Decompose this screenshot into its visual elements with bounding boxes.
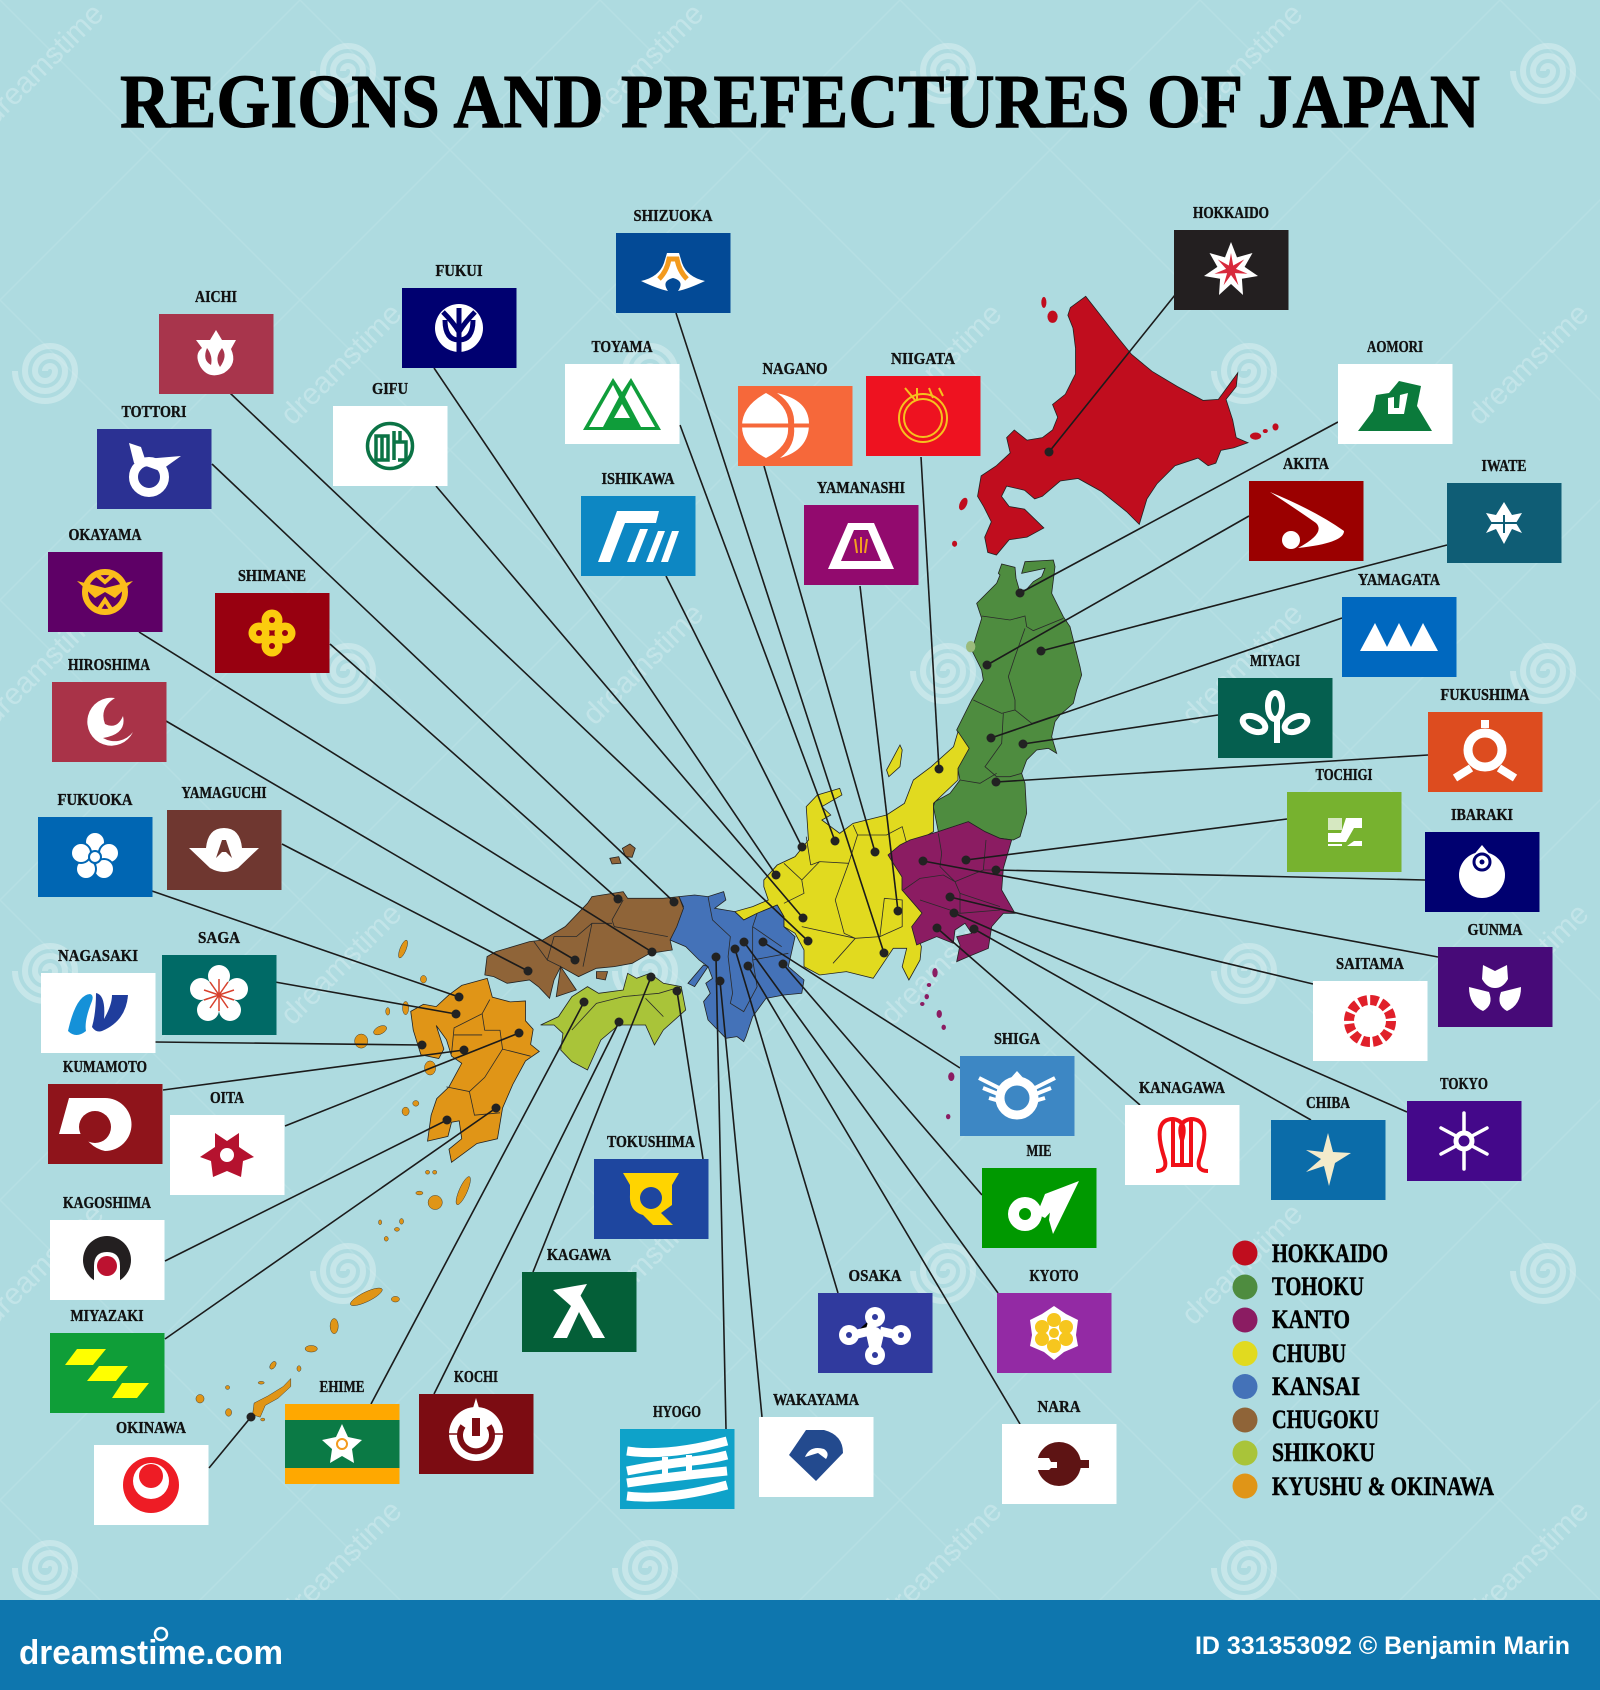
- flag: Ishikawa: [581, 469, 696, 576]
- flag: Toyama: [565, 337, 680, 444]
- watermark text: dreamstime: [1175, 0, 1309, 131]
- leader: Chiba: [970, 924, 1311, 1120]
- flag: Gunma: GUNMA: [1468, 920, 1523, 939]
- flag: Nagasaki: [41, 946, 156, 1053]
- flag: Aomori: [1338, 337, 1452, 444]
- flag: Tottori: TOTTORI: [122, 402, 187, 421]
- flag: Aomori: AOMORI: [1367, 337, 1423, 356]
- leader: Yamanashi: [860, 586, 902, 916]
- flag: Kumamoto: KUMAMOTO: [63, 1057, 147, 1076]
- flag: Tokushima: TOKUSHIMA: [607, 1132, 696, 1151]
- flag: Kyoto: KYOTO: [1030, 1266, 1078, 1285]
- leader: Shiga: [758, 938, 960, 1068]
- leader: Yamaguchi: [282, 844, 532, 976]
- leader lines and location dots: [139, 295, 1447, 1468]
- watermark text: dreamstime: [274, 1494, 408, 1628]
- leader: Shizuoka: [676, 313, 888, 958]
- footer bar: [0, 1600, 1600, 1690]
- leader: Nara: [744, 962, 1020, 1424]
- leader: Hokkaido: [1044, 295, 1175, 456]
- region: Kyushu and Okinawa: [196, 939, 539, 1421]
- flag: Saitama: SAITAMA: [1336, 954, 1405, 973]
- watermark text: dreamstime: [1461, 1494, 1595, 1628]
- region: Hokkaido: [952, 296, 1279, 555]
- leader: Shimane: [330, 644, 622, 904]
- flag: Kanagawa: [1125, 1078, 1240, 1185]
- leader: Hyogo: [712, 952, 726, 1429]
- flag: Miyagi: MIYAGI: [1250, 651, 1300, 670]
- legend: Hokkaido: [1232, 1239, 1388, 1268]
- leader: Kochi: [434, 1018, 624, 1394]
- watermark text: dreamstime: [874, 297, 1008, 431]
- flag: Shimane: [215, 566, 330, 673]
- flag: Ehime: EHIME: [320, 1377, 364, 1396]
- legend: Tohoku: [1232, 1272, 1364, 1301]
- leader: Fukui: [434, 368, 780, 880]
- legend: Kanto: [1232, 1305, 1350, 1334]
- flag: Tochigi: [1287, 765, 1402, 872]
- leader: Iwate: [1036, 545, 1447, 656]
- flag: Kyoto: [997, 1266, 1112, 1373]
- leader: Okinawa: [209, 1412, 256, 1468]
- leader: Miyagi: [1018, 715, 1218, 748]
- flag: Miyagi: [1218, 651, 1332, 758]
- flag: Shizuoka: SHIZUOKA: [634, 206, 713, 225]
- flag: Nagano: [738, 359, 852, 466]
- flag: Miyazaki: MIYAZAKI: [70, 1306, 144, 1325]
- flag: Fukui: [402, 261, 516, 368]
- leader: Yamagata: [986, 618, 1342, 742]
- leader: Gifu: [436, 486, 808, 922]
- leader: Tokyo: [950, 908, 1407, 1112]
- leader: Kumamoto: [163, 1046, 468, 1090]
- watermark text: dreamstime: [874, 897, 1008, 1031]
- legend: Chubu: [1232, 1339, 1346, 1368]
- leader: Mie: [778, 960, 982, 1195]
- flag: Okayama: [48, 525, 162, 632]
- flag: Nagasaki: NAGASAKI: [58, 946, 138, 965]
- flag: Fukuoka: [38, 790, 152, 897]
- flag: Niigata: NIIGATA: [891, 349, 956, 368]
- title: REGIONS AND PREFECTURES OF JAPAN: [120, 60, 1480, 144]
- flag: Saga: SAGA: [198, 928, 241, 947]
- leader: Nagasaki: [155, 1040, 426, 1050]
- flag: Okinawa: OKINAWA: [116, 1418, 187, 1437]
- leader: Wakayama: [716, 976, 762, 1417]
- flag: Toyama: TOYAMA: [592, 337, 653, 356]
- legend: Hokkaido: HOKKAIDO: [1272, 1239, 1388, 1268]
- watermark text: dreamstime: [274, 897, 408, 1031]
- flag: Wakayama: [759, 1390, 874, 1497]
- flag: Kagawa: KAGAWA: [547, 1245, 612, 1264]
- flag: Kanagawa: KANAGAWA: [1139, 1078, 1226, 1097]
- leader: Kagoshima: [165, 1116, 452, 1261]
- flag: Ibaraki: IBARAKI: [1451, 805, 1513, 824]
- region: Kanto: [888, 822, 1015, 977]
- flag: Yamanashi: YAMANASHI: [817, 478, 905, 497]
- flag: Kochi: KOCHI: [454, 1367, 498, 1386]
- watermark text: dreamstime: [874, 1494, 1008, 1628]
- flag: Mie: [982, 1141, 1096, 1248]
- flag: Yamagata: [1342, 570, 1456, 677]
- flag: Aichi: [159, 287, 274, 394]
- flag: Akita: AKITA: [1283, 454, 1330, 473]
- flag: Ibaraki: [1425, 805, 1540, 912]
- flag: Niigata: [866, 349, 980, 456]
- leader: Akita: [982, 516, 1249, 670]
- flag: Miyazaki: [50, 1306, 164, 1413]
- region: Shikoku: [541, 973, 686, 1070]
- flag: Hyogo: HYOGO: [653, 1402, 701, 1421]
- legend: Kansai: KANSAI: [1272, 1372, 1360, 1401]
- flag: Ehime: [285, 1377, 400, 1484]
- leader: Tokushima: [672, 986, 703, 1159]
- leader: Saitama: [946, 892, 1313, 984]
- flag: Gifu: [333, 379, 448, 486]
- flag: Gifu: GIFU: [372, 379, 408, 398]
- flag: Wakayama: WAKAYAMA: [773, 1390, 860, 1409]
- flag: Tottori: [97, 402, 212, 509]
- islands: Izu: [920, 983, 954, 1119]
- flag: Oita: OITA: [210, 1088, 245, 1107]
- region: Chubu: [735, 732, 969, 980]
- leader: Miyazaki: [165, 1104, 500, 1339]
- flag: Kumamoto: [48, 1057, 162, 1164]
- leader: Niigata: [921, 457, 944, 774]
- legend: Kyushu and Okinawa: KYUSHU & OKINAWA: [1272, 1472, 1494, 1501]
- leader: Oita: [285, 1028, 524, 1126]
- flag: Osaka: OSAKA: [848, 1266, 902, 1285]
- watermark text: dreamstime: [1461, 897, 1595, 1031]
- leader: Fukushima: [992, 755, 1428, 786]
- flag: Saitama: [1313, 954, 1428, 1061]
- legend: Kansai: [1232, 1372, 1360, 1401]
- leader: Ishikawa: [666, 576, 806, 852]
- flag: Gunma: [1438, 920, 1552, 1027]
- flag: Okinawa: [94, 1418, 208, 1525]
- flag: Fukuoka: FUKUOKA: [58, 790, 133, 809]
- leader: Ibaraki: [992, 866, 1425, 880]
- flag: Fukushima: [1428, 685, 1542, 792]
- leader: Aomori: [1016, 422, 1338, 598]
- leader: Osaka: [730, 944, 838, 1293]
- watermark text: dreamstime: [576, 0, 710, 131]
- flag: Kagawa: [522, 1245, 636, 1352]
- leader: Kyoto: [740, 938, 998, 1293]
- watermark text: dreamstime: [576, 597, 710, 731]
- watermark text: dreamstime: [1175, 597, 1309, 731]
- flag: Tochigi: TOCHIGI: [1316, 765, 1373, 784]
- flag: Tokyo: TOKYO: [1440, 1074, 1488, 1093]
- watermark text: dreamstime: [576, 1197, 710, 1331]
- region: Kansai: [670, 892, 804, 1042]
- flag: Hokkaido: HOKKAIDO: [1193, 203, 1269, 222]
- legend: [1232, 1239, 1494, 1501]
- flag: Chiba: [1271, 1093, 1386, 1200]
- footer logo text: dreamstime.com: [19, 1634, 283, 1672]
- watermark text: dreamstime: [274, 297, 408, 431]
- flag: Kochi: [419, 1367, 534, 1474]
- footer logo icon: [155, 1628, 167, 1640]
- leader: Kagawa: [533, 972, 656, 1272]
- flag: Nara: [1002, 1397, 1116, 1504]
- flag: Tokushima: [594, 1132, 708, 1239]
- leader: Nagano: [764, 466, 880, 856]
- flag: Nagano: NAGANO: [762, 359, 828, 378]
- map of Japan: [196, 296, 1279, 1421]
- watermark text: dreamstime: [1461, 297, 1595, 431]
- flag: Yamaguchi: [167, 783, 282, 890]
- flag: Fukui: FUKUI: [436, 261, 483, 280]
- flag: Nara: NARA: [1038, 1397, 1081, 1416]
- flag: Ishikawa: ISHIKAWA: [602, 469, 675, 488]
- legend: Chugoku: CHUGOKU: [1272, 1405, 1379, 1434]
- flag: Saga: [162, 928, 276, 1035]
- footer image credit: ID 331353092 © Benjamin Marin: [1195, 1632, 1570, 1660]
- flag: Shizuoka: [616, 206, 730, 313]
- leader: Toyama: [680, 425, 840, 846]
- flag: Shiga: [960, 1029, 1074, 1136]
- legend: Shikoku: [1232, 1438, 1375, 1467]
- leader: Gunma: [918, 856, 1438, 957]
- flag: Iwate: IWATE: [1482, 456, 1526, 475]
- flag: Aichi: AICHI: [195, 287, 237, 306]
- flag: Kagoshima: KAGOSHIMA: [63, 1193, 152, 1212]
- leader: Saga: [275, 982, 460, 1018]
- leader: Tottori: [212, 464, 678, 906]
- flag: Hiroshima: HIROSHIMA: [68, 655, 151, 674]
- watermark text: dreamstime: [1175, 1197, 1309, 1331]
- flag: Iwate: [1447, 456, 1562, 563]
- leader: Fukuoka: [152, 891, 464, 1002]
- legend: Chubu: CHUBU: [1272, 1339, 1346, 1368]
- legend: Kanto: KANTO: [1272, 1305, 1350, 1334]
- flag: Osaka: [818, 1266, 932, 1373]
- flag: Mie: MIE: [1026, 1141, 1052, 1160]
- leader: Aichi: [230, 393, 812, 946]
- flag: Oita: [170, 1088, 284, 1195]
- flag: Shimane: SHIMANE: [238, 566, 306, 585]
- flag: Kagoshima: [50, 1193, 164, 1300]
- legend: Tohoku: TOHOKU: [1272, 1272, 1364, 1301]
- flag: Yamagata: YAMAGATA: [1358, 570, 1441, 589]
- flag: Tokyo: [1407, 1074, 1522, 1181]
- flag: Yamanashi: [804, 478, 918, 585]
- legend: Chugoku: [1232, 1405, 1379, 1434]
- flag: Yamaguchi: YAMAGUCHI: [182, 783, 267, 802]
- leader: Okayama: [139, 632, 656, 956]
- region: Tohoku: [933, 560, 1082, 840]
- flag: Hiroshima: [52, 655, 166, 762]
- flag: Chiba: CHIBA: [1306, 1093, 1351, 1112]
- leader: Tochigi: [962, 819, 1287, 864]
- flag: Hyogo: [620, 1402, 734, 1509]
- leader: Ehime: [371, 998, 588, 1404]
- flag: Fukushima: FUKUSHIMA: [1440, 685, 1530, 704]
- flag: Hokkaido: [1174, 203, 1288, 310]
- flag: Shiga: SHIGA: [994, 1029, 1041, 1048]
- leader: Kanagawa: [932, 924, 1140, 1105]
- leader: Hiroshima: [166, 721, 580, 964]
- flag: Akita: [1249, 454, 1364, 561]
- legend: Shikoku: SHIKOKU: [1272, 1438, 1375, 1467]
- region: Chugoku: [485, 844, 683, 998]
- flag: Okayama: OKAYAMA: [68, 525, 142, 544]
